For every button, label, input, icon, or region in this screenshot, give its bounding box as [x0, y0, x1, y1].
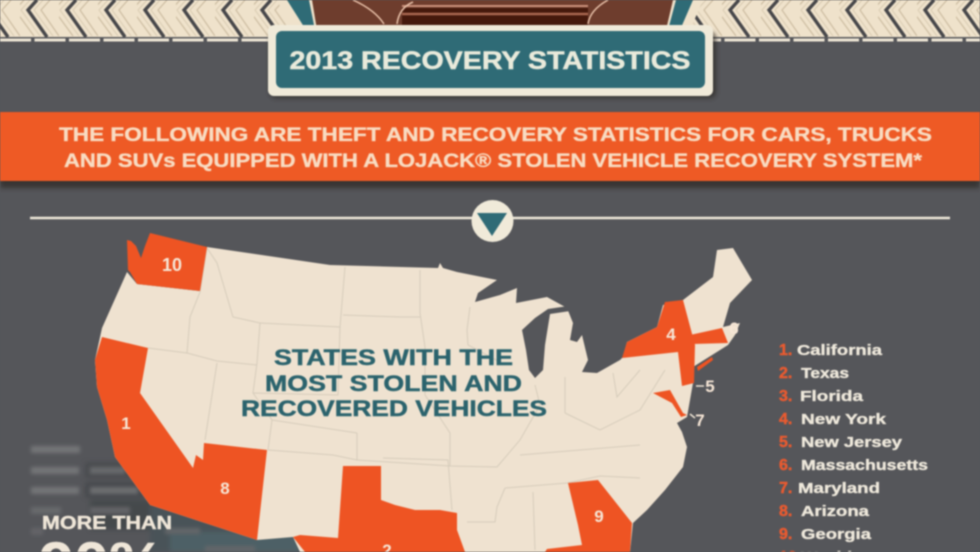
banner text: THE FOLLOWING ARE THEFT AND RECOVERY STATISTICS FOR CARS, TRUCKS [59, 124, 932, 146]
map heading: STATES WITH THE [274, 345, 513, 370]
orange banner [0, 112, 980, 188]
state numbers: 5 [705, 377, 715, 396]
ranked state list: 1. [779, 342, 792, 359]
ranked state list [779, 342, 928, 552]
recovery rate callout: MORE THAN [42, 513, 172, 533]
ranked state list: New York [801, 411, 887, 428]
recovery rate callout [39, 513, 172, 552]
ranked state list: California [797, 342, 883, 359]
contiguous states base [95, 247, 752, 552]
Lake Michigan [522, 306, 570, 378]
Washington [127, 233, 207, 291]
Maryland [653, 390, 687, 417]
Long Island [697, 357, 713, 371]
state numbers: 7 [695, 411, 705, 430]
ranked state list: 7. [779, 480, 792, 497]
title: 2013 RECOVERY STATISTICS [290, 47, 690, 75]
Massachusetts [690, 328, 728, 344]
ranked state list: 2. [779, 365, 792, 382]
Arizona [150, 443, 267, 540]
ranked state list: 5. [779, 434, 792, 451]
ranked state list: Maryland [798, 480, 880, 497]
ranked state list: Arizona [801, 503, 870, 520]
Lake Huron inlet [570, 333, 582, 342]
ranked state list: Florida [800, 388, 864, 405]
state numbers: 6 [729, 319, 739, 338]
state borders [148, 248, 665, 550]
state numbers [121, 255, 739, 552]
ranked state list: 3. [779, 388, 792, 405]
tire track band [0, 0, 980, 40]
ranked state list: 9. [779, 526, 792, 543]
Texas [293, 466, 465, 552]
emblem: vehicle badge [277, 0, 703, 30]
faded background lines [31, 446, 255, 552]
map heading: MOST STOLEN AND [265, 371, 522, 396]
map heading: RECOVERED VEHICLES [241, 396, 547, 421]
ranked state list: New Jersey [801, 434, 903, 451]
state numbers: 1 [121, 414, 131, 433]
divider with arrow [30, 200, 950, 242]
ranked state list: Texas [801, 365, 849, 382]
ranked state list: Massachusetts [801, 457, 928, 474]
state numbers: 4 [666, 325, 676, 344]
banner text: AND SUVs EQUIPPED WITH A LOJACK® STOLEN VEHICLE RECOVERY SYSTEM* [64, 150, 922, 172]
title badge [268, 25, 716, 98]
state numbers: 10 [162, 255, 182, 275]
pointer ticks [690, 386, 704, 418]
state numbers: 8 [220, 479, 230, 498]
California [95, 337, 205, 505]
map of the United States [95, 233, 752, 552]
stone texture [85, 462, 300, 552]
ranked state list: 6. [779, 457, 792, 474]
ranked state list: Georgia [801, 526, 872, 543]
ranked state list: 8. [779, 503, 792, 520]
New York [622, 300, 695, 386]
Georgia and Florida [545, 480, 632, 552]
ranked state list: 4. [779, 411, 792, 428]
state numbers: 9 [594, 507, 604, 526]
